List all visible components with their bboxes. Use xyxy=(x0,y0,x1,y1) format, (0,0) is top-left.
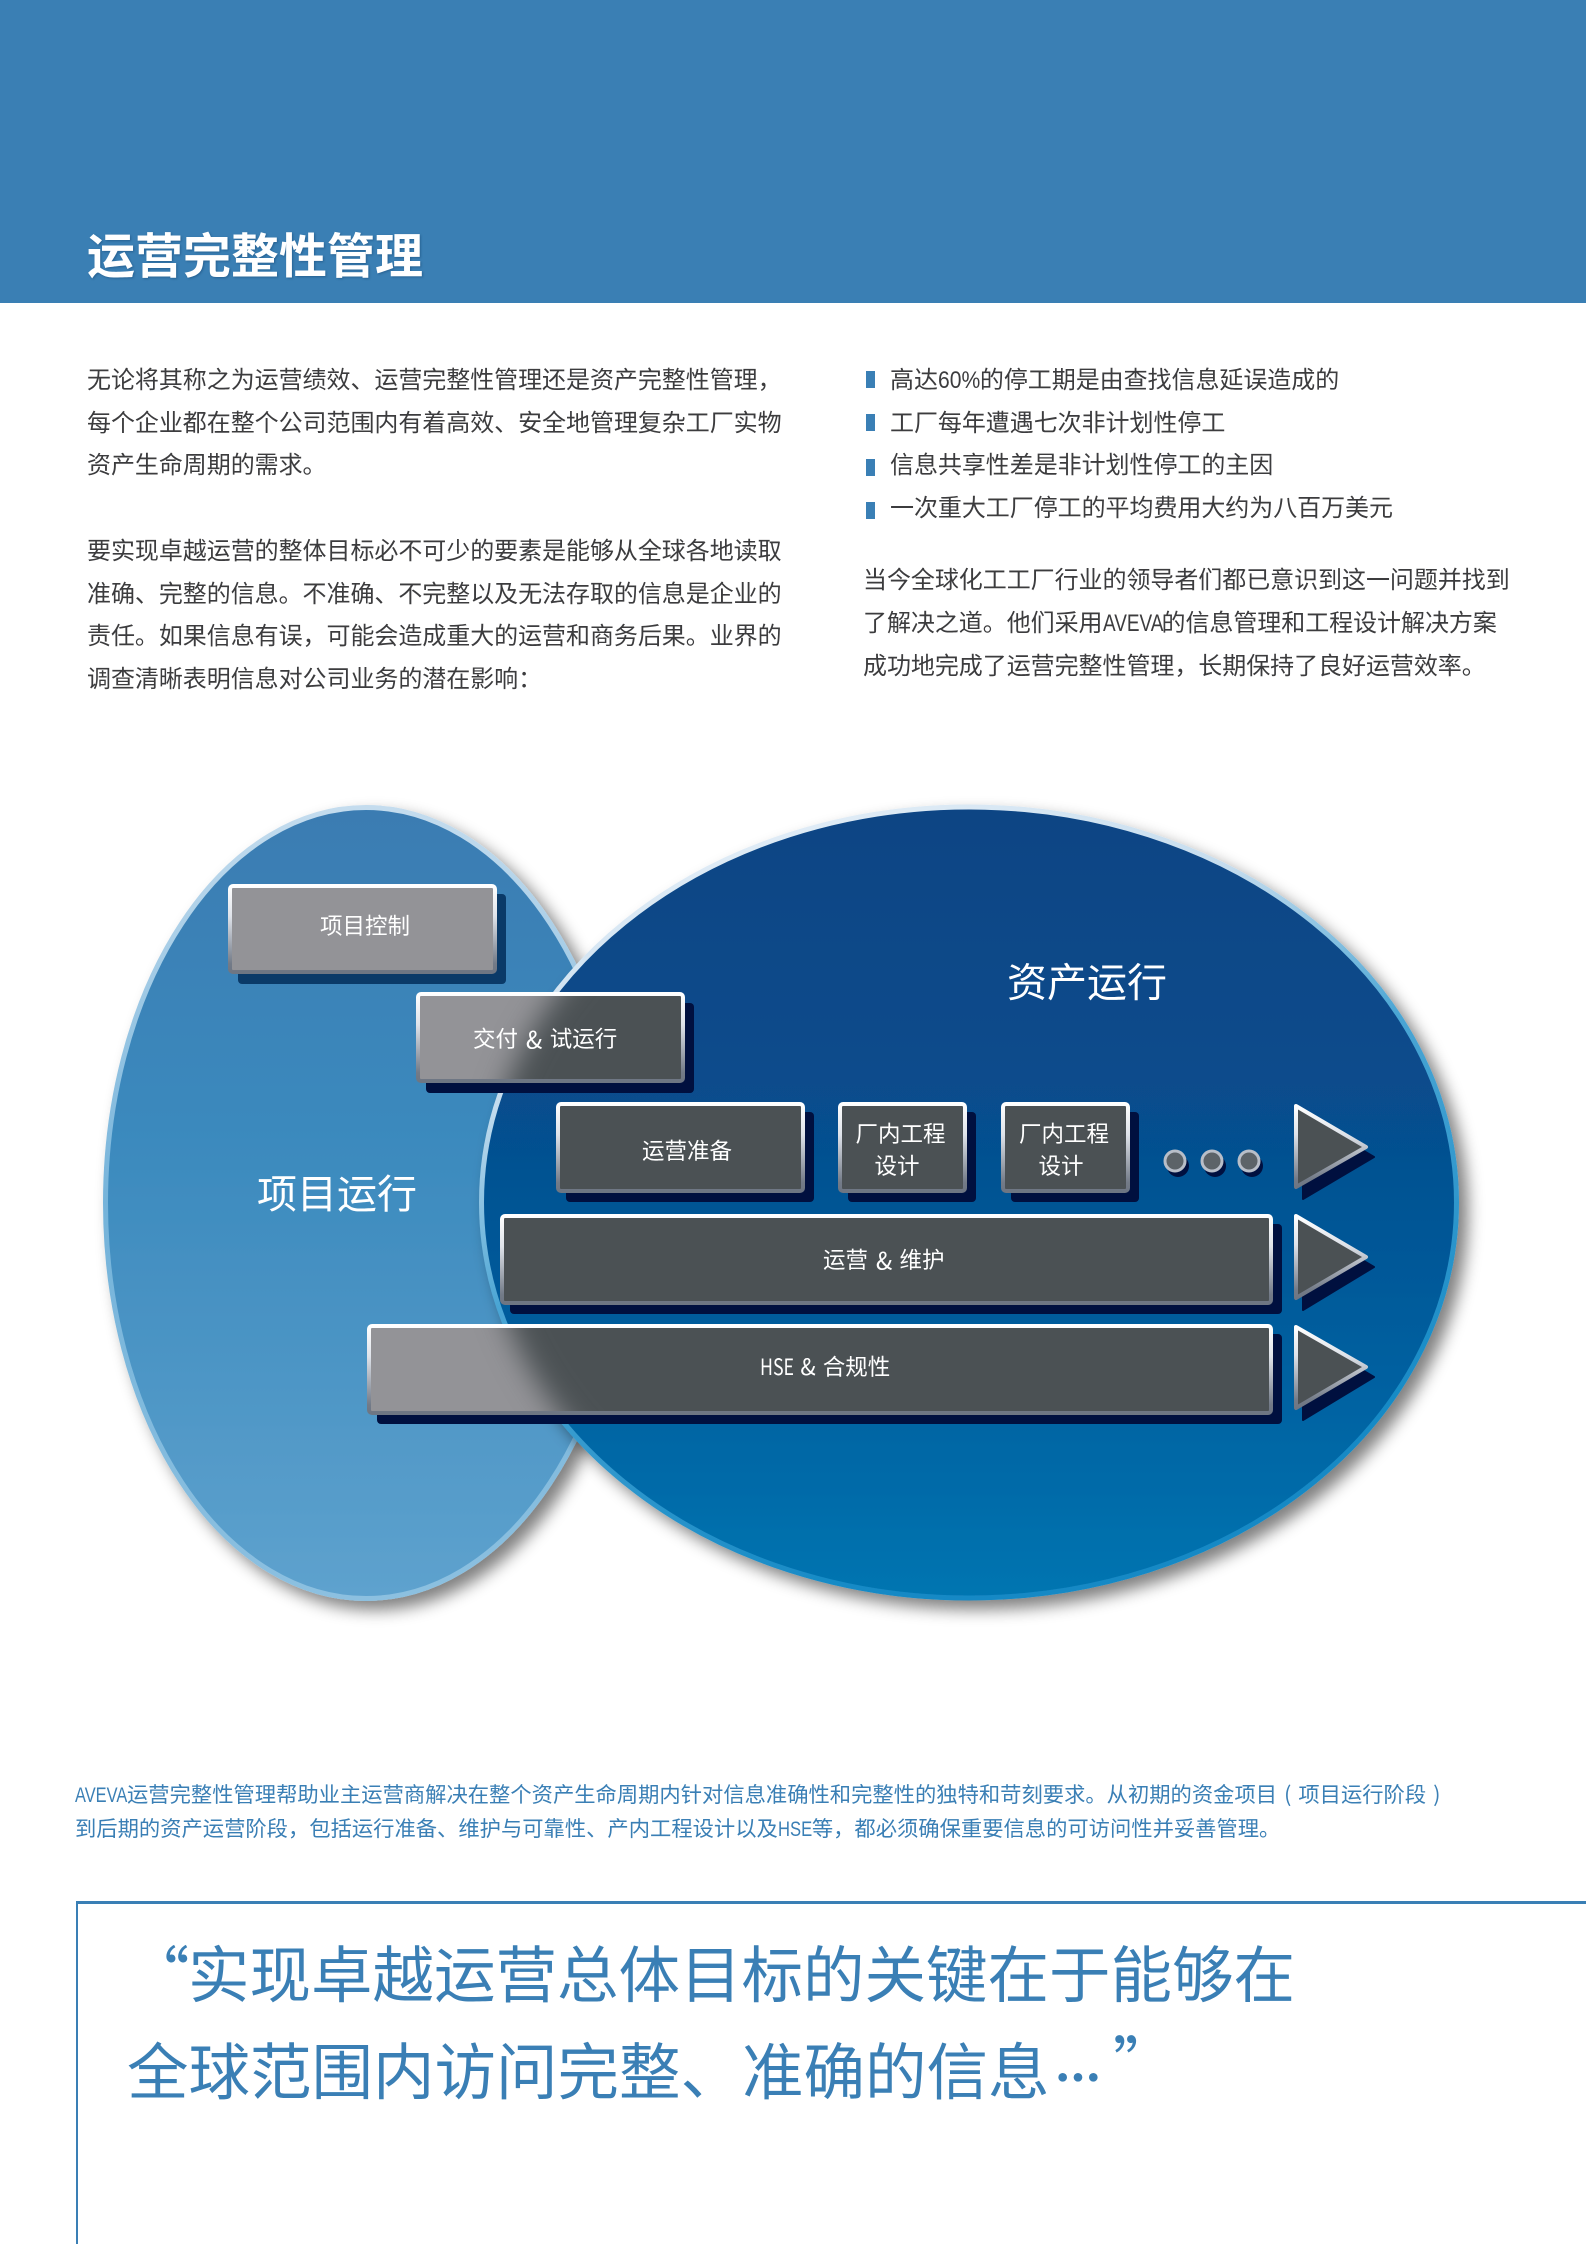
box: operations and maintenance: 维护 xyxy=(899,1243,945,1275)
text block: left column intro: 调查清晰表明信息对公司业务的潜在影响： xyxy=(87,659,542,694)
box: plant engineering design 1: 厂内工程 xyxy=(855,1117,946,1149)
box: plant engineering design 1: 设计 xyxy=(874,1149,920,1181)
arrow: bottom row xyxy=(1296,1327,1374,1420)
text block: left column intro: 每个企业都在整个公司范围内有着高效、安全地管理复杂工厂实物 xyxy=(87,403,782,438)
diagram: project and asset operations xyxy=(100,802,1480,1621)
box: project control xyxy=(230,886,506,984)
box: operational readiness: 运营准备 xyxy=(642,1134,732,1166)
arrow: top row xyxy=(1296,1106,1374,1199)
text block: right column conclusion: 了解决之道。他们采用 的信息管理和工程设计解决方案 xyxy=(863,603,1497,638)
pull quote: “ xyxy=(128,1926,190,2015)
label: project operations: 项目运行 xyxy=(257,1162,417,1220)
text block: right column conclusion: 当今全球化工工厂行业的领导者们都已意识到这一问题并找到 xyxy=(863,560,1510,595)
caption text: 到后期的资产运营阶段，包括运行准备、维护与可靠性、产内工程设计以及 等，都必须确保重要信息的可访问性并妥善管理。 xyxy=(75,1812,1280,1843)
text block: left column intro: 资产生命周期的需求。 xyxy=(87,445,326,480)
text block: left column intro: 责任。如果信息有误，可能会造成重大的运营和商务后果。业界的 xyxy=(87,616,782,651)
pull quote xyxy=(127,1926,1295,2112)
pull quote: ” xyxy=(1113,2016,1175,2105)
box: project control: 项目控制 xyxy=(320,909,410,941)
box: HSE and compliance: HSE xyxy=(760,1350,794,1382)
asset operations ellipse xyxy=(482,807,1456,1598)
text block: left column intro: 无论将其称之为运营绩效、运营完整性管理还是资产完整性管理， xyxy=(87,360,782,395)
bullet list: downtime facts: 工厂每年遭遇七次非计划性停工 xyxy=(890,403,1225,438)
project operations ellipse xyxy=(106,808,626,1598)
pull quote: 全球范围内访问完整、准确的信息 xyxy=(127,2023,1050,2112)
box: plant engineering design 2: 设计 xyxy=(1038,1149,1084,1181)
title: 运营完整性管理 xyxy=(87,217,423,287)
text block: left column intro: 准确、完整的信息。不准确、不完整以及无法存取的信息是企业的 xyxy=(87,574,782,609)
text block: left column intro xyxy=(87,360,782,694)
box: handover and commissioning: 试运行 xyxy=(550,1022,617,1054)
box: operational readiness xyxy=(558,1104,814,1202)
box: HSE and compliance xyxy=(369,1326,1282,1424)
text block: right column conclusion xyxy=(863,560,1510,681)
bullet list: downtime facts: 信息共享性差是非计划性停工的主因 xyxy=(890,445,1273,480)
icon: ellipsis dots xyxy=(1165,1151,1263,1177)
box: plant engineering design 2 xyxy=(1003,1104,1139,1202)
caption text: AVEVA xyxy=(75,1783,127,1807)
text block: right column conclusion: 成功地完成了运营完整性管理，长期保持了良好运营效率。 xyxy=(863,646,1486,681)
text block: left column intro: 要实现卓越运营的整体目标必不可少的要素是能够从全球各地读取 xyxy=(87,531,782,566)
bullet list: downtime facts: 高达 的停工期是由查找信息延误造成的 xyxy=(890,360,1339,395)
pull quote: … xyxy=(1055,2043,1101,2109)
caption text: 运营完整性管理帮助业主运营商解决在整个资产生命周期内针对信息准确性和完整性的独特和苛刻要求。从初期的资金项目 项目运行阶段 xyxy=(127,1778,1426,1809)
caption text: ( xyxy=(1284,1778,1291,1809)
header band xyxy=(0,0,1586,303)
box: HSE and compliance: 合规性 xyxy=(823,1350,890,1382)
quote frame xyxy=(76,1901,1586,2244)
arrow: middle row xyxy=(1296,1216,1374,1310)
caption text: ) xyxy=(1433,1778,1440,1809)
pull quote: 实现卓越运营总体目标的关键在于能够在 xyxy=(188,1926,1295,2015)
box: handover and commissioning: 交付 xyxy=(473,1022,518,1054)
box: handover and commissioning xyxy=(418,994,694,1093)
box: plant engineering design 2: 厂内工程 xyxy=(1019,1117,1109,1149)
box: operations and maintenance: & xyxy=(876,1242,892,1276)
bullet list: downtime facts: 一次重大工厂停工的平均费用大约为八百万美元 xyxy=(890,488,1393,523)
bullet list: downtime facts xyxy=(866,360,1393,523)
caption text xyxy=(75,1778,1440,1843)
box: HSE and compliance: & xyxy=(800,1350,816,1382)
bullet list: downtime facts: 60% xyxy=(938,367,980,394)
box: handover and commissioning: & xyxy=(526,1020,542,1056)
box: operations and maintenance xyxy=(502,1216,1282,1314)
caption text: HSE xyxy=(778,1817,812,1841)
box: plant engineering design 1 xyxy=(840,1104,976,1202)
box: operations and maintenance: 运营 xyxy=(823,1243,868,1275)
label: asset operations: 资产运行 xyxy=(1007,950,1167,1008)
text block: right column conclusion: AVEVA xyxy=(1102,610,1163,637)
